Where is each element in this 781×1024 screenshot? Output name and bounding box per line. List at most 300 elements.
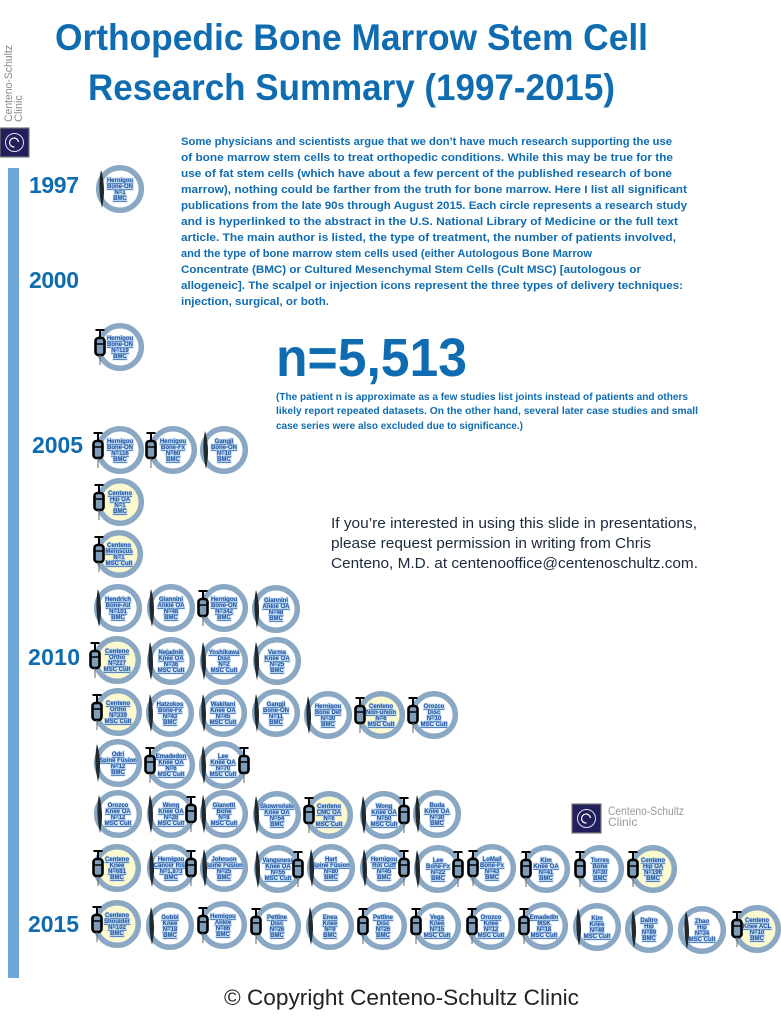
study: LoMail Bone-Fx N=43: LoMail xyxy=(482,857,502,863)
study: Hernigou Bone-ON N=119: N=119 xyxy=(111,348,129,354)
study: Gobbi Knee N=18 xyxy=(149,905,191,947)
study: Orozco Knee OA N=12: Orozco xyxy=(108,803,129,809)
study: Hatzokos Bone-Fx N=43: Hatzokos xyxy=(157,702,184,708)
study: Centeno Hip OA N=1: Centeno xyxy=(108,491,132,497)
study: Emadedon Knee OA N=6: Emadedon xyxy=(156,754,187,760)
study: Wakitani Knee OA N=45: Wakitani xyxy=(211,702,236,708)
study: Hernigou Bone Def N=30: BMC xyxy=(321,722,335,728)
study: Gobbi Knee N=18: N=18 xyxy=(163,927,178,933)
year labels: 2015 xyxy=(28,911,79,937)
study: Skowroński Knee OA N=54: Skowroński xyxy=(260,804,294,810)
study: Vega Knee N=15 xyxy=(412,905,458,947)
study: Buda Knee OA N=30: Knee OA xyxy=(424,809,450,815)
study: Yoshikawa Disc N=2: Disc xyxy=(218,656,231,662)
study: Torres Bone N=30: BMC xyxy=(593,876,607,882)
study: Centeno Knee N=681: BMC xyxy=(110,875,124,881)
study: Centeno Knee N=681: N=681 xyxy=(108,869,127,875)
study: Hendrich Bone-All N=101: Bone-All xyxy=(106,603,131,609)
study: Centeno Ortho N=227: MSC Cult xyxy=(104,667,130,673)
study: Vangsness Knee OA N=55: Knee OA xyxy=(265,864,291,870)
study: Gangji Bone-ON N=11: Gangji xyxy=(267,702,286,708)
study: Hernigou Bone-ON N=342: Bone-ON xyxy=(211,603,237,609)
study: Vega Knee N=15: N=15 xyxy=(430,927,445,933)
logo: clinic logo mid-page: Clinic xyxy=(608,815,637,829)
study: Gangji Bone-ON N=11 xyxy=(254,692,297,734)
study: Centeno Non-union N=6: Centeno xyxy=(369,704,393,710)
study: Centeno Hip OA N=1: N=1 xyxy=(114,503,126,509)
title: Orthopedic Bone Marrow Stem Cell xyxy=(55,17,648,58)
study: Hernigou Bone-ON N=342 xyxy=(198,587,245,629)
study: Orozco Knee N=12: MSC Cult xyxy=(478,933,504,939)
study: Zhao Hip N=34: MSC Cult xyxy=(689,937,715,943)
study: Hernigou Rot Cuff N=45 xyxy=(362,847,408,889)
study: Wong Knee OA N=50: N=50 xyxy=(377,816,392,822)
study: Lee Bone-Fx N=22: BMC xyxy=(431,876,445,882)
study: Odri Spine Fusion N=12: BMC xyxy=(111,770,125,776)
study: Centeno Hip OA N=1 xyxy=(94,481,141,523)
study: Centeno Ortho N=339: N=339 xyxy=(109,713,128,719)
study: Daltro Hip N=89 xyxy=(628,908,670,950)
study: Wong Knee OA N=50 xyxy=(361,794,408,836)
study: Centeno Knee N=681: Centeno xyxy=(105,857,129,863)
study: Kim Knee N=49: Knee xyxy=(590,922,605,928)
study: Centeno Shoulder N=102: BMC xyxy=(110,931,124,937)
patient count note: likely report repeated datasets. On the other hand, several later case studies and small xyxy=(276,406,698,417)
study: Giannini Ankle OA N=48: N=48 xyxy=(164,609,179,615)
study: Wong Knee OA N=50: Knee OA xyxy=(371,810,397,816)
intro paragraph: injection, surgical, or both. xyxy=(181,296,329,308)
study: Centeno Knee N=681: Knee xyxy=(110,863,125,869)
study: Kim Knee N=49 xyxy=(576,906,618,948)
study: Centeno Knee ACL N=10: Knee ACL xyxy=(743,924,772,930)
intro paragraph: of bone marrow stem cells to treat orthopedic conditions. While this may be true for the xyxy=(181,152,673,164)
intro paragraph: marrow), nothing could be farther from the truth for bone marrow. Here I list all significant xyxy=(181,184,687,196)
study: Hernigou Bone-ON N=116: Hernigou xyxy=(107,439,133,445)
study: Wong Knee OA N=28: Knee OA xyxy=(158,809,184,815)
study: Hemigou Ankle N=86 xyxy=(198,904,244,946)
intro paragraph: Concentrate (BMC) or Cultured Mesenchymal Stem Cells (Cult MSC) [autologous or xyxy=(181,264,642,276)
study: Vangsness Knee OA N=55 xyxy=(255,848,302,890)
study: Hernigou Rot Cuff N=45: N=45 xyxy=(377,869,392,875)
study: Pettine Disc N=26 xyxy=(252,905,298,947)
study: Varma Knee OA N=25: Varma xyxy=(268,650,287,656)
study: Emadedin MSK N=18 xyxy=(520,905,565,947)
study: Yoshikawa Disc N=2: Yoshikawa xyxy=(209,650,240,656)
study: Centeno Non-union N=6: Non-union xyxy=(366,710,396,716)
study: Giannini Ankle OA N=48 xyxy=(149,587,192,629)
study: Orozco Knee N=12: N=12 xyxy=(484,927,499,933)
study: Orozco Disc N=10 xyxy=(408,694,455,736)
study: Centeno Meniscus N=1 xyxy=(94,533,140,575)
study: Hernigou Bone-Fx N=60: N=60 xyxy=(166,451,181,457)
study: Enea Knee N=9: Knee xyxy=(323,921,338,927)
study: Wong Knee OA N=50: MSC Cult xyxy=(371,822,397,828)
study: Lee Knee OA N=70: Lee xyxy=(218,754,229,760)
permission note: If you’re interested in using this slide in presentations, xyxy=(331,516,697,532)
study: Johnson Spine Fusion N=25: N=25 xyxy=(217,869,232,875)
study: Hernigou Bone-ON N=342: N=342 xyxy=(215,609,234,615)
study: LoMail Bone-Fx N=43: BMC xyxy=(485,875,499,881)
study: Buda Knee OA N=30 xyxy=(415,793,458,835)
study: Pettine Disc N=26: Disc xyxy=(377,921,390,927)
study: Hart Spine Fusion N=80 xyxy=(309,847,352,889)
study: Centeno Knee ACL N=10: BMC xyxy=(750,936,764,942)
study: Skowroński Knee OA N=54 xyxy=(254,794,298,836)
study: Nejadnik Knee OA N=36: Nejadnik xyxy=(158,650,184,656)
study: Pettine Disc N=26 xyxy=(358,905,404,947)
study: Hernigou Bone-Fx N=60: Bone-Fx xyxy=(161,445,186,451)
study: Gianotti Bone N=8: Gianotti xyxy=(213,803,236,809)
study: Hendrich Bone-All N=101 xyxy=(96,587,139,629)
study: Gianotti Bone N=8 xyxy=(201,793,245,835)
study: Vega Knee N=15: Knee xyxy=(430,921,445,927)
permission note: please request permission in writing from Chris xyxy=(331,536,651,552)
study: Centeno Hip OA N=196 xyxy=(628,848,674,890)
study: Wakitani Knee OA N=45: N=45 xyxy=(216,714,231,720)
study: Hernigou Rot Cuff N=45: Rot Cuff xyxy=(372,863,397,869)
study: Zhao Hip N=34: Hip xyxy=(697,925,707,931)
study: Hart Spine Fusion N=80: BMC xyxy=(324,875,338,881)
study: Orozco Knee OA N=12 xyxy=(97,793,139,835)
study: Hernigou Bone-Fx N=60: BMC xyxy=(166,457,180,463)
study: Skowroński Knee OA N=54: BMC xyxy=(270,822,284,828)
study: Hernigou Bone-Fx N=60: Hernigou xyxy=(160,439,186,445)
study: Hernigou Cancer Risk N=1,873 xyxy=(149,847,196,889)
study: Enea Knee N=9: BMC xyxy=(323,933,337,939)
study: Hernigou Bone-ON N=1: Hernigou xyxy=(107,178,133,184)
study: Odri Spine Fusion N=12: Spine Fusion xyxy=(99,758,137,764)
study: Centeno Ortho N=227 xyxy=(90,639,138,681)
study: Emadedon Knee OA N=6 xyxy=(146,744,192,786)
study: Lee Bone-Fx N=22: N=22 xyxy=(431,870,446,876)
study: Wong Knee OA N=28: Wong xyxy=(163,803,180,809)
study: Centeno Knee N=681 xyxy=(94,847,138,889)
study: Lee Knee OA N=70: MSC Cult xyxy=(210,772,236,778)
study: Centeno Shoulder N=102: Centeno xyxy=(105,913,129,919)
study: Johnson Spine Fusion N=25: Spine Fusion xyxy=(205,863,243,869)
study: Giannini Ankle OA N=48 xyxy=(254,588,297,630)
study: Giannini Ankle OA N=48: Giannini xyxy=(159,597,183,603)
study: Daltro Hip N=89: Daltro xyxy=(640,918,658,924)
study: Kim Knee OA N=41 xyxy=(522,848,567,890)
study: Orozco Disc N=10: Disc xyxy=(428,710,441,716)
study: Centeno Shoulder N=102: N=102 xyxy=(108,925,127,931)
study: Nejadnik Knee OA N=36: Knee OA xyxy=(158,656,184,662)
study: Gangji Bone-ON N=10: Gangji xyxy=(215,439,234,445)
study: Orozco Knee OA N=12: Knee OA xyxy=(105,809,131,815)
study: Hendrich Bone-All N=101: BMC xyxy=(111,615,125,621)
study: Kim Knee N=49: MSC Cult xyxy=(584,934,610,940)
study: Centeno Non-union N=6: MSC Cult xyxy=(368,722,394,728)
study: Hernigou Cancer Risk N=1,873: Hernigou xyxy=(158,857,184,863)
study: Kim Knee N=49: Kim xyxy=(591,916,603,922)
study: Giannini Ankle OA N=48: Ankle OA xyxy=(157,603,185,609)
study: Pettine Disc N=26: BMC xyxy=(376,933,390,939)
study: Buda Knee OA N=30: N=30 xyxy=(430,815,445,821)
permission note: Centeno, M.D. at centenooffice@centenoschultz.com. xyxy=(331,556,698,572)
study: Emadedin MSK N=18: MSC Cult xyxy=(531,933,557,939)
intro paragraph xyxy=(181,136,688,308)
study: Daltro Hip N=89: Hip xyxy=(644,924,654,930)
patient count note xyxy=(276,392,698,432)
study: Centeno CMC OA N=6: CMC OA xyxy=(317,810,342,816)
study: Hernigou Bone Def N=30: N=30 xyxy=(321,716,336,722)
study: Gobbi Knee N=18: Gobbi xyxy=(161,915,179,921)
study: Johnson Spine Fusion N=25 xyxy=(202,847,245,889)
permission note xyxy=(331,516,698,572)
study: Hernigou Bone-ON N=1: BMC xyxy=(113,196,127,202)
study: Hatzokos Bone-Fx N=43: BMC xyxy=(163,720,177,726)
study: Varma Knee OA N=25: N=25 xyxy=(270,662,285,668)
study: Centeno Hip OA N=196: N=196 xyxy=(644,870,663,876)
year labels: 2005 xyxy=(32,432,83,458)
study: Gobbi Knee N=18: Knee xyxy=(163,921,178,927)
study: Torres Bone N=30: N=30 xyxy=(593,870,608,876)
study: Orozco Knee OA N=12: N=12 xyxy=(111,815,126,821)
study: Odri Spine Fusion N=12 xyxy=(95,742,139,784)
study: Kim Knee OA N=41: Knee OA xyxy=(533,864,559,870)
study: Yoshikawa Disc N=2 xyxy=(201,640,245,682)
intro paragraph: article. The main author is listed, the type of treatment, the number of patients involved, xyxy=(181,232,676,244)
study: LoMail Bone-Fx N=43 xyxy=(468,847,513,889)
study: Wong Knee OA N=28: N=28 xyxy=(164,815,179,821)
study: Emadedin MSK N=18: MSK xyxy=(537,921,551,927)
year labels: 1997 xyxy=(29,172,79,198)
study: Centeno Meniscus N=1: Meniscus xyxy=(105,549,133,555)
study: Orozco Knee OA N=12: MSC Cult xyxy=(105,821,131,827)
study: Centeno Ortho N=339: Ortho xyxy=(110,707,126,713)
study: Centeno CMC OA N=6: N=6 xyxy=(323,816,335,822)
year labels: 2000 xyxy=(29,267,79,293)
study: Hendrich Bone-All N=101: N=101 xyxy=(109,609,128,615)
study: Gianotti Bone N=8: Bone xyxy=(216,809,232,815)
study: Vangsness Knee OA N=55: Vangsness xyxy=(262,858,294,864)
study: Hernigou Bone-ON N=1 xyxy=(99,168,141,210)
study: Hernigou Bone-ON N=119: BMC xyxy=(113,354,127,360)
study: Gianotti Bone N=8: MSC Cult xyxy=(211,821,237,827)
year labels: 2010 xyxy=(28,644,80,670)
study: Yoshikawa Disc N=2: N=2 xyxy=(218,662,230,668)
study: Giannini Ankle OA N=48: N=48 xyxy=(269,610,284,616)
study: Wong Knee OA N=28 xyxy=(148,793,196,835)
logo: vertical clinic logo: Clinic xyxy=(13,95,25,122)
study: Hernigou Cancer Risk N=1,873: BMC xyxy=(164,875,178,881)
patient count note: case series were also excluded due to significance.) xyxy=(276,421,523,432)
study: Centeno Non-union N=6: N=6 xyxy=(375,716,387,722)
study: Centeno Ortho N=227: Centeno xyxy=(105,649,129,655)
study: Giannini Ankle OA N=48: Ankle OA xyxy=(262,604,290,610)
title: Research Summary (1997-2015) xyxy=(88,67,615,108)
study: Gangji Bone-ON N=10 xyxy=(203,429,245,471)
study: Hernigou Bone-ON N=342: Hernigou xyxy=(211,597,237,603)
study: Orozco Disc N=10: Orozco xyxy=(424,704,445,710)
study: Johnson Spine Fusion N=25: BMC xyxy=(217,875,231,881)
study: Zhao Hip N=34 xyxy=(681,909,723,951)
study: Hart Spine Fusion N=80: Spine Fusion xyxy=(312,863,350,869)
study: Orozco Disc N=10: N=10 xyxy=(427,716,442,722)
study: Centeno Shoulder N=102 xyxy=(92,903,138,945)
study: Hernigou Bone-ON N=1: Bone-ON xyxy=(107,184,133,190)
study: Kim Knee N=49: N=49 xyxy=(590,928,605,934)
study: Gangji Bone-ON N=11: BMC xyxy=(269,720,283,726)
logo: vertical clinic logo xyxy=(0,45,29,157)
timeline bar xyxy=(8,168,19,978)
study: Pettine Disc N=26: BMC xyxy=(270,933,284,939)
study: Hatzokos Bone-Fx N=43: N=43 xyxy=(163,714,178,720)
study: Gangji Bone-ON N=10: N=10 xyxy=(217,451,232,457)
study: Hernigou Cancer Risk N=1,873: N=1,873 xyxy=(160,869,183,875)
study: Johnson Spine Fusion N=25: Johnson xyxy=(212,857,237,863)
study: Hernigou Bone Def N=30: Hernigou xyxy=(315,704,341,710)
study: Centeno Meniscus N=1: N=1 xyxy=(113,555,125,561)
patient count note: (The patient n is approximate as a few studies list joints instead of patients and others xyxy=(276,392,688,403)
study: Varma Knee OA N=25 xyxy=(254,640,298,682)
study: Zhao Hip N=34: Zhao xyxy=(695,919,709,925)
study: Kim Knee OA N=41: N=41 xyxy=(539,870,554,876)
study: Centeno Ortho N=339: MSC Cult xyxy=(105,719,131,725)
study: Enea Knee N=9: Enea xyxy=(323,915,338,921)
study: Lee Knee OA N=70: N=70 xyxy=(216,766,231,772)
study: Hemigou Ankle N=86: BMC xyxy=(216,932,230,938)
study: Nejadnik Knee OA N=36 xyxy=(148,640,192,682)
study: Vangsness Knee OA N=55: N=55 xyxy=(271,870,286,876)
study: Giannini Ankle OA N=48: BMC xyxy=(164,615,178,621)
intro paragraph: and is hyperlinked to the abstract in the U.S. National Library of Medicine or the full text xyxy=(181,216,678,228)
study: Torres Bone N=30 xyxy=(576,848,621,890)
study: Odri Spine Fusion N=12: Odri xyxy=(112,752,124,758)
study: Skowroński Knee OA N=54: Knee OA xyxy=(264,810,290,816)
study: Torres Bone N=30: Bone xyxy=(592,864,608,870)
study: Skowroński Knee OA N=54: N=54 xyxy=(270,816,285,822)
study: Hatzokos Bone-Fx N=43 xyxy=(148,692,191,734)
study: Odri Spine Fusion N=12: N=12 xyxy=(111,764,126,770)
study: LoMail Bone-Fx N=43: N=43 xyxy=(485,869,500,875)
study: Gianotti Bone N=8: N=8 xyxy=(218,815,230,821)
study: Centeno CMC OA N=6: Centeno xyxy=(317,804,341,810)
study: Pettine Disc N=26: Disc xyxy=(271,921,284,927)
study: Orozco Knee N=12 xyxy=(468,905,512,947)
study: Centeno Ortho N=227: Ortho xyxy=(109,655,125,661)
study: Gobbi Knee N=18: BMC xyxy=(163,933,177,939)
intro paragraph: Some physicians and scientists argue that we don’t have much research supporting the use xyxy=(181,136,672,148)
study: Orozco Knee N=12: Orozco xyxy=(481,915,502,921)
study: Centeno Non-union N=6 xyxy=(356,694,402,736)
study: Centeno Hip OA N=1: Hip OA xyxy=(110,497,131,503)
study: Hernigou Bone-ON N=119: Bone-ON xyxy=(107,342,133,348)
year labels xyxy=(28,172,83,937)
study: Wakitani Knee OA N=45: Knee OA xyxy=(210,708,236,714)
study: Centeno Shoulder N=102: Shoulder xyxy=(104,919,131,925)
study: Lee Bone-Fx N=22: Bone-Fx xyxy=(426,864,451,870)
study: Vangsness Knee OA N=55: MSC Cult xyxy=(265,876,291,882)
study: Hemigou Ankle N=86: Hemigou xyxy=(210,914,236,920)
study: Hernigou Bone-ON N=342: BMC xyxy=(217,615,231,621)
study: Vega Knee N=15: Vega xyxy=(430,915,445,921)
study: Nejadnik Knee OA N=36: MSC Cult xyxy=(158,668,184,674)
study: LoMail Bone-Fx N=43: Bone-Fx xyxy=(480,863,505,869)
study: Hernigou Bone-ON N=1: N=1 xyxy=(114,190,126,196)
study: Emadedon Knee OA N=6: N=6 xyxy=(165,766,177,772)
study: Torres Bone N=30: Torres xyxy=(591,858,610,864)
study: Centeno Hip OA N=196: Hip OA xyxy=(643,864,664,870)
logo: clinic logo mid-page xyxy=(572,804,684,833)
study: Hernigou Bone-ON N=116: N=116 xyxy=(111,451,129,457)
study: Hart Spine Fusion N=80: N=80 xyxy=(324,869,339,875)
study: Hatzokos Bone-Fx N=43: Bone-Fx xyxy=(158,708,183,714)
study: Hendrich Bone-All N=101: Hendrich xyxy=(105,597,131,603)
study: Yoshikawa Disc N=2: MSC Cult xyxy=(211,668,237,674)
study: Centeno Ortho N=339 xyxy=(92,691,139,733)
study: Hernigou Bone-ON N=119: Hernigou xyxy=(107,336,133,342)
study: Gangji Bone-ON N=11: Bone-ON xyxy=(263,708,289,714)
study: Pettine Disc N=26: Pettine xyxy=(373,915,394,921)
study: Hernigou Bone-ON N=116: Bone-ON xyxy=(107,445,133,451)
study: Buda Knee OA N=30: BMC xyxy=(430,821,444,827)
study: Hernigou Bone Def N=30: Bone Def xyxy=(315,710,342,716)
study: Zhao Hip N=34: N=34 xyxy=(695,931,710,937)
intro paragraph: and the type of bone marrow stem cells used (either Autologous Bone Marrow xyxy=(181,248,592,260)
study: Centeno CMC OA N=6: MSC Cult xyxy=(316,822,342,828)
study: Centeno Knee ACL N=10: N=10 xyxy=(750,930,765,936)
study: Orozco Disc N=10: MSC Cult xyxy=(421,722,447,728)
study: Wakitani Knee OA N=45 xyxy=(201,692,244,734)
study: Hernigou Bone-Fx N=60 xyxy=(146,429,194,471)
intro paragraph: use of fat stem cells (which have about a few percent of the published research of bone xyxy=(181,168,672,180)
study: Centeno Hip OA N=196: Centeno xyxy=(641,858,665,864)
study: Hernigou Bone-ON N=116 xyxy=(94,429,141,471)
study: Varma Knee OA N=25: BMC xyxy=(270,668,284,674)
study: Wakitani Knee OA N=45: MSC Cult xyxy=(210,720,236,726)
study: Pettine Disc N=26: N=26 xyxy=(376,927,391,933)
study: Lee Bone-Fx N=22 xyxy=(415,848,462,890)
study: Nejadnik Knee OA N=36: N=36 xyxy=(164,662,179,668)
study: Emadedon Knee OA N=6: MSC Cult xyxy=(158,772,184,778)
study: Gangji Bone-ON N=10: Bone-ON xyxy=(211,445,237,451)
study: Enea Knee N=9 xyxy=(308,905,351,947)
study: Lee Knee OA N=70: Knee OA xyxy=(210,760,236,766)
study: Centeno Knee ACL N=10 xyxy=(732,908,778,950)
intro paragraph: allogeneic]. The scalpel or injection icons represent the three types of delivery techniques: xyxy=(181,280,683,292)
study: Kim Knee OA N=41: Kim xyxy=(540,858,552,864)
study: Pettine Disc N=26: Pettine xyxy=(267,915,288,921)
study: Emadedin MSK N=18: N=18 xyxy=(537,927,552,933)
study: Hernigou Rot Cuff N=45: BMC xyxy=(377,875,391,881)
study: Giannini Ankle OA N=48: BMC xyxy=(269,616,283,622)
study: Centeno Hip OA N=1: BMC xyxy=(113,509,127,515)
intro paragraph: publications from the late 90s through August 2015. Each circle represents a research study xyxy=(181,200,688,212)
study: Wong Knee OA N=50: Wong xyxy=(376,804,393,810)
study: Centeno Meniscus N=1: MSC Cult xyxy=(106,561,132,567)
study: Enea Knee N=9: N=9 xyxy=(324,927,336,933)
study: Centeno Ortho N=339: Centeno xyxy=(106,701,130,707)
study: Vega Knee N=15: MSC Cult xyxy=(424,933,450,939)
study: Centeno CMC OA N=6 xyxy=(304,794,350,836)
study: Buda Knee OA N=30: Buda xyxy=(430,803,445,809)
study: Daltro Hip N=89: BMC xyxy=(642,936,656,942)
study: Centeno Meniscus N=1: Centeno xyxy=(107,543,131,549)
study: Lee Bone-Fx N=22: Lee xyxy=(433,858,444,864)
study: Lee Knee OA N=70 xyxy=(201,744,248,786)
logo: vertical clinic logo: Centeno-Schultz xyxy=(3,45,15,122)
study: Kim Knee OA N=41: BMC xyxy=(539,876,553,882)
study: Gangji Bone-ON N=10: BMC xyxy=(217,457,231,463)
copyright: © Copyright Centeno-Schultz Clinic xyxy=(224,985,579,1010)
study: Emadedin MSK N=18: Emadedin xyxy=(530,915,559,921)
study: Hemigou Ankle N=86: N=86 xyxy=(216,926,231,932)
study: Varma Knee OA N=25: Knee OA xyxy=(264,656,290,662)
study: Hernigou Bone-ON N=119 xyxy=(96,326,141,368)
study: Hernigou Cancer Risk N=1,873: Cancer Risk xyxy=(154,863,189,869)
